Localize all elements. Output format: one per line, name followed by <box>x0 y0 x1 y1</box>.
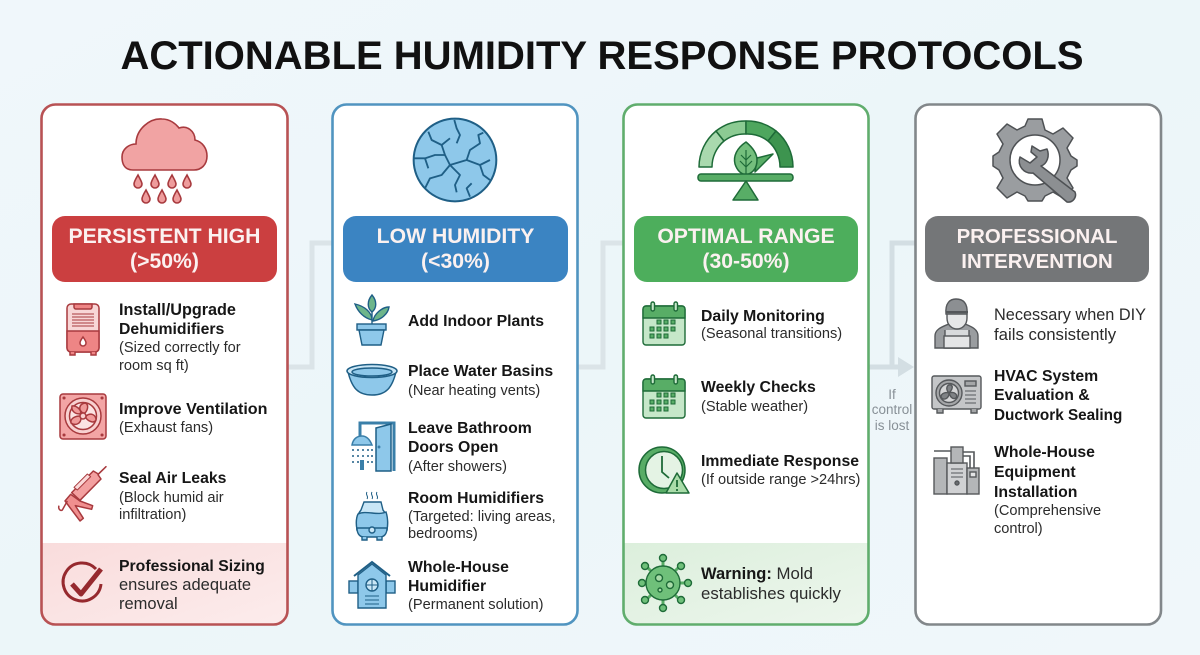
callout: professional sizing: removal <box>119 595 178 613</box>
item: room humidifiers: Room Humidifiers <box>408 490 544 507</box>
item: leave bathroom doors open <box>408 420 532 475</box>
icon: check mark <box>63 563 101 601</box>
item: room humidifiers: bedrooms) <box>408 526 478 542</box>
item: hvac system evaluation: Evaluation & <box>994 387 1090 404</box>
icon: clock with warning <box>639 447 689 493</box>
icon: exhaust fan <box>60 394 106 439</box>
icon: caulk gun <box>59 467 106 521</box>
icon: gauge with leaf and balance <box>698 121 793 200</box>
callout: mold warning: Warning: Mold <box>701 564 813 583</box>
item: place water basins: Place Water Basins <box>408 363 553 380</box>
callout: professional sizing <box>119 558 265 613</box>
header: optimal range <box>634 216 858 282</box>
header: persistent high: PERSISTENT HIGH <box>69 225 260 248</box>
item: whole-house equipment installation: Whole-House <box>994 444 1095 461</box>
title: ACTIONABLE HUMIDITY RESPONSE PROTOCOLS <box>120 34 1084 78</box>
icon: potted plant <box>355 295 389 345</box>
callout: professional sizing: Professional Sizing <box>119 558 265 575</box>
item: immediate response: Immediate Response <box>701 453 859 470</box>
arrow label: if control is lost: If <box>888 387 896 402</box>
item: necessary when DIY fails: fails consistently <box>994 325 1117 344</box>
item: daily monitoring: Daily Monitoring <box>701 308 825 325</box>
arrow: optimal range to professional intervention <box>869 243 915 377</box>
icon: cracked dry globe <box>414 119 496 201</box>
item: whole-house equipment installation: (Comprehensive <box>994 503 1101 519</box>
icon: rain cloud <box>122 119 207 203</box>
item: room humidifiers <box>408 490 556 542</box>
icon: dehumidifier <box>67 304 99 355</box>
header: persistent high: (>50%) <box>130 250 199 273</box>
item: daily monitoring <box>701 308 842 342</box>
arrow: persistent high to low humidity <box>288 243 332 367</box>
item: install dehumidifiers: Install/Upgrade <box>119 301 236 319</box>
item: seal air leaks: infiltration) <box>119 507 186 523</box>
item: weekly checks: (Stable weather) <box>701 399 808 415</box>
item: improve ventilation: (Exhaust fans) <box>119 420 213 436</box>
header: optimal range: (30-50%) <box>702 250 790 273</box>
arrow: low humidity to optimal range <box>578 243 623 367</box>
item: seal air leaks <box>119 470 227 523</box>
header: persistent high <box>52 216 277 282</box>
item: improve ventilation: Improve Ventilation <box>119 400 267 418</box>
header: low humidity: LOW HUMIDITY <box>377 225 534 248</box>
icon: room humidifier <box>356 492 388 540</box>
header: low humidity: (<30%) <box>421 250 490 273</box>
item: whole-house humidifier: (Permanent solution) <box>408 597 543 613</box>
icon: calendar daily <box>643 302 685 345</box>
icon: mold spore <box>638 554 692 612</box>
item: whole-house humidifier <box>408 559 543 613</box>
item: install dehumidifiers: room sq ft) <box>119 358 189 374</box>
item: place water basins <box>408 363 553 399</box>
item: necessary when DIY fails <box>994 306 1146 344</box>
arrow label: if control is lost <box>872 387 912 433</box>
panel: optimal range <box>624 104 868 625</box>
icon: hvac unit <box>932 376 981 413</box>
icon: shower and open door <box>352 423 394 471</box>
warning band: professional sizing <box>42 543 287 625</box>
item: install dehumidifiers: (Sized correctly for <box>119 340 241 356</box>
item: whole-house equipment installation <box>994 444 1101 537</box>
item: seal air leaks: Seal Air Leaks <box>119 470 227 487</box>
item: immediate response <box>701 453 860 488</box>
arrow label: if control is lost: is lost <box>875 418 909 433</box>
warning band: mold <box>624 543 868 625</box>
item: hvac system evaluation: HVAC System <box>994 368 1098 385</box>
item: weekly checks <box>701 379 816 415</box>
icon: water basin <box>347 364 397 395</box>
item: daily monitoring: (Seasonal transitions) <box>701 326 842 342</box>
header: professional intervention: INTERVENTION <box>961 251 1113 273</box>
item: add indoor plants: Add Indoor Plants <box>408 313 544 330</box>
item: hvac system evaluation: Ductwork Sealing <box>994 407 1122 424</box>
callout: professional sizing: ensures adequate <box>119 576 251 594</box>
header: low humidity <box>343 216 568 282</box>
item: room humidifiers: (Targeted: living areas, <box>408 509 556 525</box>
item: whole-house humidifier: Humidifier <box>408 578 486 595</box>
panel: low humidity <box>332 104 578 624</box>
item: whole-house equipment installation: Equipment <box>994 464 1076 481</box>
panel: persistent high <box>42 104 288 625</box>
icon: whole-house equipment <box>934 447 979 494</box>
callout: mold warning <box>701 564 842 603</box>
item: leave bathroom doors open: (After showers) <box>408 459 507 475</box>
header: optimal range: OPTIMAL RANGE <box>657 225 835 248</box>
item: leave bathroom doors open: Doors Open <box>408 439 498 456</box>
item: weekly checks: Weekly Checks <box>701 379 816 396</box>
icon: whole-house humidifier <box>349 562 395 608</box>
icon: gear and wrench <box>993 119 1077 202</box>
header: professional intervention <box>925 216 1149 282</box>
item: leave bathroom doors open: Leave Bathroom <box>408 420 532 437</box>
item: seal air leaks: (Block humid air <box>119 490 224 506</box>
icon: technician <box>935 299 978 348</box>
item: necessary when DIY fails: Necessary when DIY <box>994 306 1146 324</box>
item: immediate response: (If outside range >24hrs) <box>701 472 860 488</box>
item: install dehumidifiers: Dehumidifiers <box>119 321 225 338</box>
item: whole-house equipment installation: Installation <box>994 484 1077 501</box>
item: whole-house humidifier: Whole-House <box>408 559 509 576</box>
arrow label: if control is lost: control <box>872 402 912 417</box>
item: place water basins: (Near heating vents) <box>408 383 540 399</box>
item: hvac system evaluation <box>994 368 1122 424</box>
panel: professional intervention <box>916 104 1161 624</box>
item: install dehumidifiers <box>119 301 241 374</box>
header: professional intervention: PROFESSIONAL <box>957 226 1117 248</box>
callout: mold warning: establishes quickly <box>701 584 842 603</box>
item: whole-house equipment installation: control) <box>994 521 1043 537</box>
icon: calendar weekly <box>643 375 685 418</box>
item: improve ventilation <box>119 400 267 436</box>
